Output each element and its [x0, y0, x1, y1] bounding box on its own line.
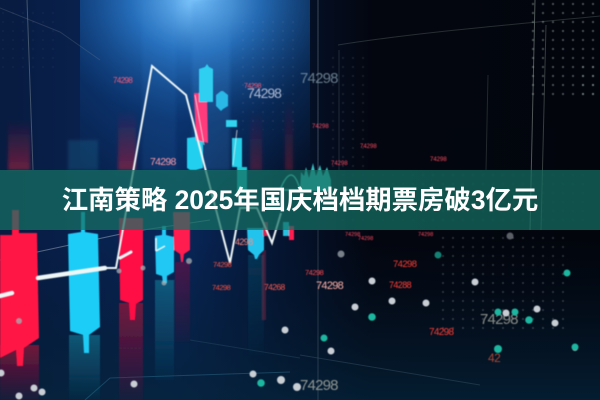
label: lower centre: 74298	[393, 259, 417, 270]
cyan candle: large	[68, 212, 100, 353]
small under-band candles	[263, 222, 294, 240]
glow streaks behind chart	[8, 100, 293, 170]
number labels: 74298	[358, 236, 373, 242]
small cyan hexagon candle	[216, 91, 228, 111]
cyan candle: top	[199, 64, 213, 102]
number labels: 74298	[430, 157, 447, 163]
candlestick chart	[0, 64, 331, 366]
small cyan bar	[226, 120, 237, 127]
number labels: 74298	[331, 161, 348, 167]
red candle: large left	[0, 210, 39, 366]
cyan candle: small	[155, 226, 174, 283]
number labels	[113, 70, 518, 394]
number labels: 74298	[418, 232, 433, 238]
title: 江南策略 2025年国庆档档期票房破3亿元	[62, 185, 538, 215]
pink candle	[194, 93, 208, 143]
teal candle under band	[237, 167, 247, 193]
bokeh dots	[0, 232, 578, 400]
number labels: 74268	[264, 282, 286, 292]
label: lower left reds: 74298	[213, 260, 232, 269]
label: pink small: 74298	[113, 76, 133, 85]
red candle: upper band	[173, 212, 190, 262]
label: middle: 74298	[150, 156, 177, 168]
title band	[0, 170, 600, 230]
number labels: 42	[488, 351, 501, 365]
cyan candle: lower right	[232, 138, 242, 167]
cyan candle: upper	[187, 130, 203, 170]
label: top right: 74298	[300, 70, 338, 87]
number labels: 74298	[305, 268, 324, 277]
number labels: 74298	[244, 83, 262, 90]
label: grey lower right: 74298	[480, 311, 518, 328]
number labels: 74298	[429, 327, 454, 338]
number labels: 74298	[316, 280, 344, 292]
waveform glow	[300, 163, 331, 192]
number labels: 74298	[212, 283, 231, 292]
number labels: 74298	[345, 232, 360, 238]
label: white top: 74298	[247, 85, 282, 101]
number labels: 4298	[235, 237, 253, 247]
number labels: 74298	[300, 377, 338, 394]
number labels: 74288	[389, 280, 412, 290]
red candle: middle	[119, 218, 143, 320]
candlestick reflections	[0, 250, 266, 400]
cyan candle: under band	[247, 228, 264, 259]
label: small red tags: 74298	[312, 124, 329, 130]
white trend line	[0, 66, 281, 296]
number labels: 74298	[360, 144, 377, 150]
